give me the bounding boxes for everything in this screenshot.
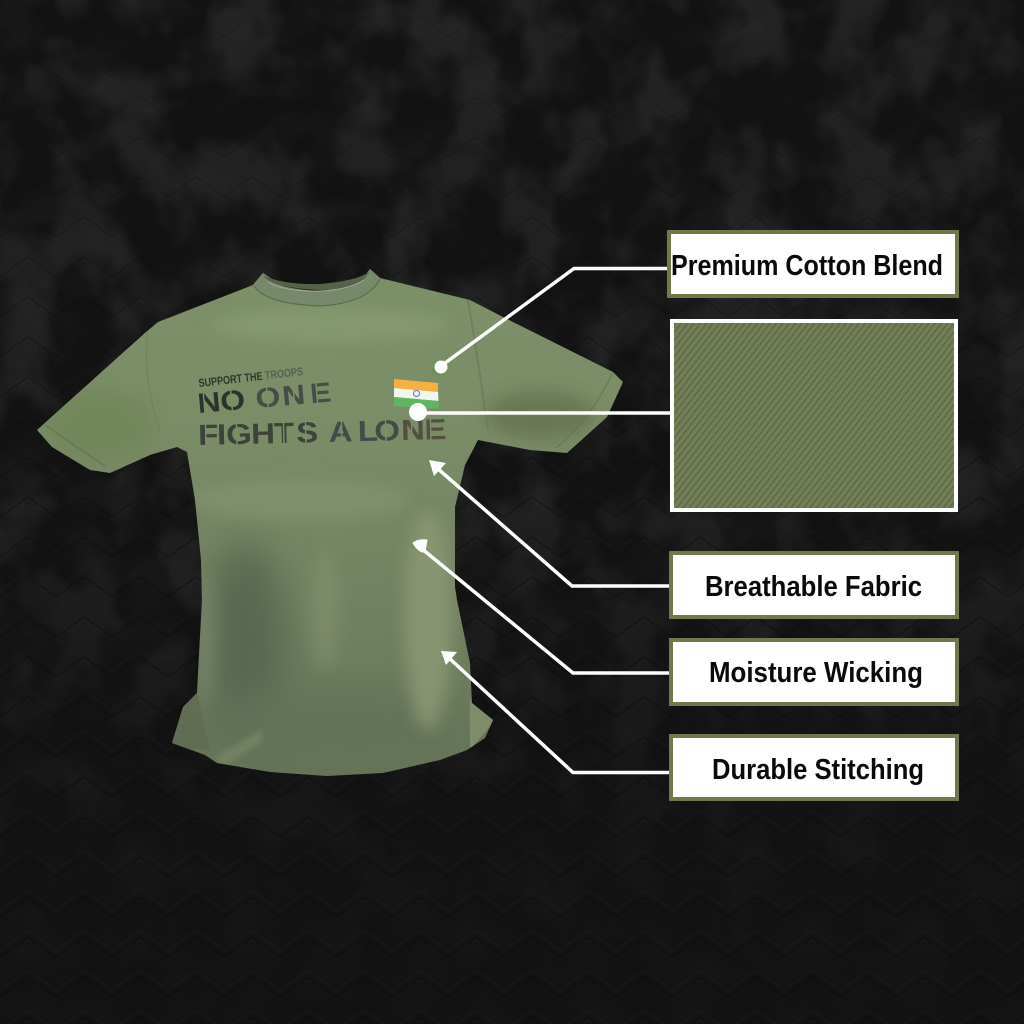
chest print: no one: NO <box>196 385 246 420</box>
callout: fabric swatch leader <box>409 403 672 421</box>
callout: breathable fabric label: Breathable Fabric <box>705 571 922 603</box>
panel: fabric texture swatch <box>672 321 956 510</box>
chest print: no one <box>196 377 333 420</box>
shirt shading <box>45 300 612 768</box>
callout: breathable fabric leader <box>429 460 670 586</box>
callout: moisture wicking label: Moisture Wicking <box>709 657 923 689</box>
chest print: fights alone: ALO <box>328 414 400 448</box>
chest print: fights alone: NE <box>401 413 447 447</box>
callout: premium cotton blend leader <box>432 268 668 374</box>
collar <box>253 269 380 306</box>
chest print: fights alone <box>198 413 447 452</box>
callout: breathable fabric label <box>671 553 957 617</box>
icon: indian flag patch <box>394 379 439 409</box>
callout: premium cotton blend label <box>669 232 957 296</box>
callout: durable stitching label: Durable Stitching <box>712 754 924 786</box>
t-shirt illustration <box>37 269 623 776</box>
chest print: fights alone: FIGHTS <box>198 416 319 452</box>
callout: premium cotton blend label: Premium Cotton Blend <box>671 250 943 282</box>
chest print: no one: ONE <box>254 377 333 414</box>
callout: durable stitching leader <box>441 651 670 772</box>
chest print: support the troops: SUPPORT THE TROOPS <box>198 366 304 390</box>
callout: moisture wicking leader <box>413 540 670 673</box>
shirt body <box>37 269 623 776</box>
callout: durable stitching label <box>671 736 957 799</box>
callout: moisture wicking label <box>671 640 957 704</box>
